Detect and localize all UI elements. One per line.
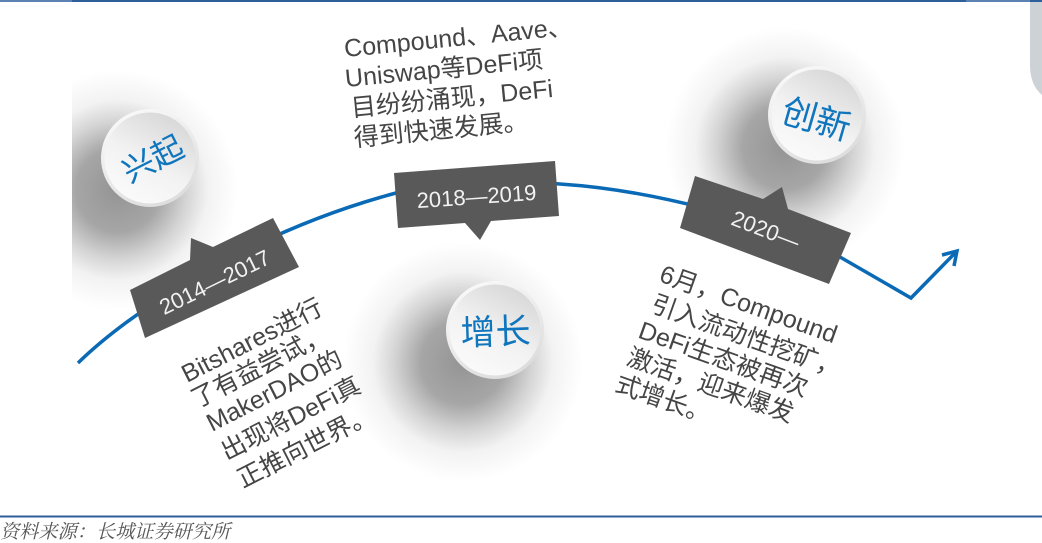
corner tab bbox=[1030, 2, 1042, 95]
label: 2018-2019: 2018—2019 bbox=[416, 180, 537, 213]
text: 2020 description: 式增长。 bbox=[612, 370, 715, 430]
text: 2018-2019 description: 目纷纷涌现，DeFi bbox=[350, 75, 554, 123]
text: 2018-2019 description: Uniswap等DeFi项 bbox=[344, 46, 544, 93]
text: 2020 description: DeFi生态被再次 bbox=[635, 316, 812, 402]
text: 2014-2017 description: 出现将DeFi真 bbox=[217, 372, 365, 466]
badge: rise: 兴起 bbox=[116, 129, 190, 190]
text: 2020 description: 激活，迎来爆发 bbox=[623, 343, 798, 428]
text: 2014-2017 description: 正推向世界。 bbox=[233, 400, 379, 493]
text: 2020 description: 6月，Compound bbox=[656, 260, 841, 349]
text: 2018-2019 description: 得到快速发展。 bbox=[353, 107, 530, 152]
text: 2014-2017 description: Bitshares进行 bbox=[177, 293, 327, 388]
label: 2014-2017: 2014—2017 bbox=[155, 245, 274, 320]
text: 2018-2019 description: Compound、Aave、 bbox=[343, 13, 574, 63]
badge: innovation bbox=[768, 66, 866, 164]
badge: growth bbox=[446, 281, 544, 379]
bottom rule bbox=[0, 516, 1042, 518]
label: 2014-2017 bbox=[130, 218, 299, 338]
shadow: growth bbox=[343, 242, 583, 482]
badge: rise bbox=[101, 109, 199, 207]
shadow: innovation bbox=[665, 27, 905, 267]
shadow: rise bbox=[72, 90, 218, 290]
label: 2020 bbox=[680, 176, 851, 284]
top rule bbox=[0, 0, 1042, 2]
label: 2018-2019 bbox=[394, 161, 559, 240]
timeline arrow bbox=[78, 183, 957, 363]
label: 2020: 2020— bbox=[728, 206, 803, 254]
badge: innovation: 创新 bbox=[777, 92, 855, 148]
text: 2014-2017 description: 了有益尝试， bbox=[187, 321, 333, 414]
text: 2020 description: 引入流动性挖矿， bbox=[647, 290, 845, 384]
text: 2014-2017 description: MakerDAO的 bbox=[202, 345, 347, 437]
badge: growth: 增长 bbox=[460, 312, 531, 353]
source note: 资料来源：长城证券研究所 bbox=[0, 521, 233, 543]
